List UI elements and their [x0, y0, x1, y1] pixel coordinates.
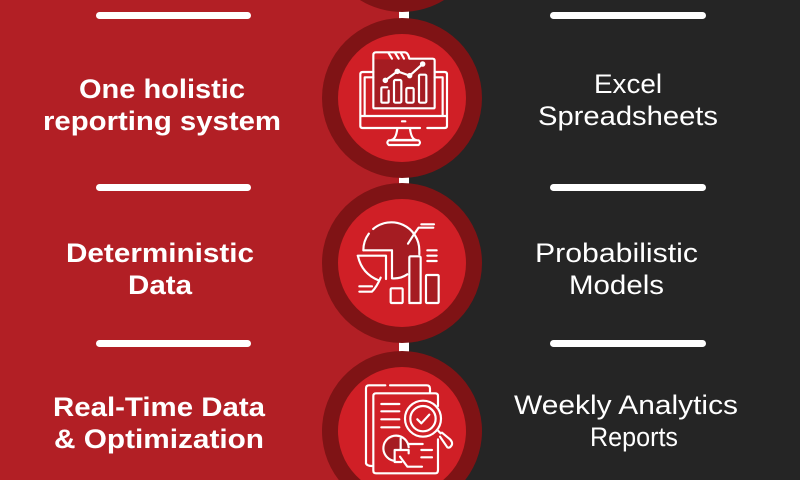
heading: One holistic reporting system: reporting system	[43, 106, 281, 136]
heading: Real-Time Data and Optimization: & Optimization	[54, 424, 264, 454]
center connector line	[399, 0, 409, 480]
icon: pie chart and bars	[322, 183, 482, 343]
text: Excel Spreadsheets: Excel	[594, 69, 662, 99]
panel: left red column	[0, 0, 409, 480]
left divider bars	[96, 12, 251, 347]
heading: Deterministic Data: Deterministic	[66, 238, 254, 268]
text: Excel Spreadsheets: Spreadsheets	[538, 101, 718, 131]
icon: monitor with chart	[322, 18, 482, 178]
heading: Real-Time Data and Optimization: Real-Time Data	[53, 392, 266, 422]
text: Weekly Analytics Reports	[514, 390, 738, 452]
right divider bars	[550, 12, 706, 347]
text: Probabilistic Models: Probabilistic	[535, 238, 698, 268]
heading: One holistic reporting system	[43, 74, 281, 136]
icon: report with magnifying glass	[322, 351, 482, 480]
text: Probabilistic Models	[535, 238, 698, 300]
text: Weekly Analytics Reports: Reports	[590, 422, 678, 452]
heading: Deterministic Data: Data	[128, 270, 193, 300]
text: Weekly Analytics Reports: Weekly Analytics	[514, 390, 738, 420]
text: Excel Spreadsheets	[538, 69, 718, 131]
heading: Real-Time Data and Optimization	[53, 392, 266, 454]
heading: Deterministic Data	[66, 238, 254, 300]
panel: right dark column	[409, 0, 800, 480]
top circle fragment	[360, 0, 444, 12]
text: Probabilistic Models: Models	[569, 270, 664, 300]
heading: One holistic reporting system: One holistic	[79, 74, 245, 104]
